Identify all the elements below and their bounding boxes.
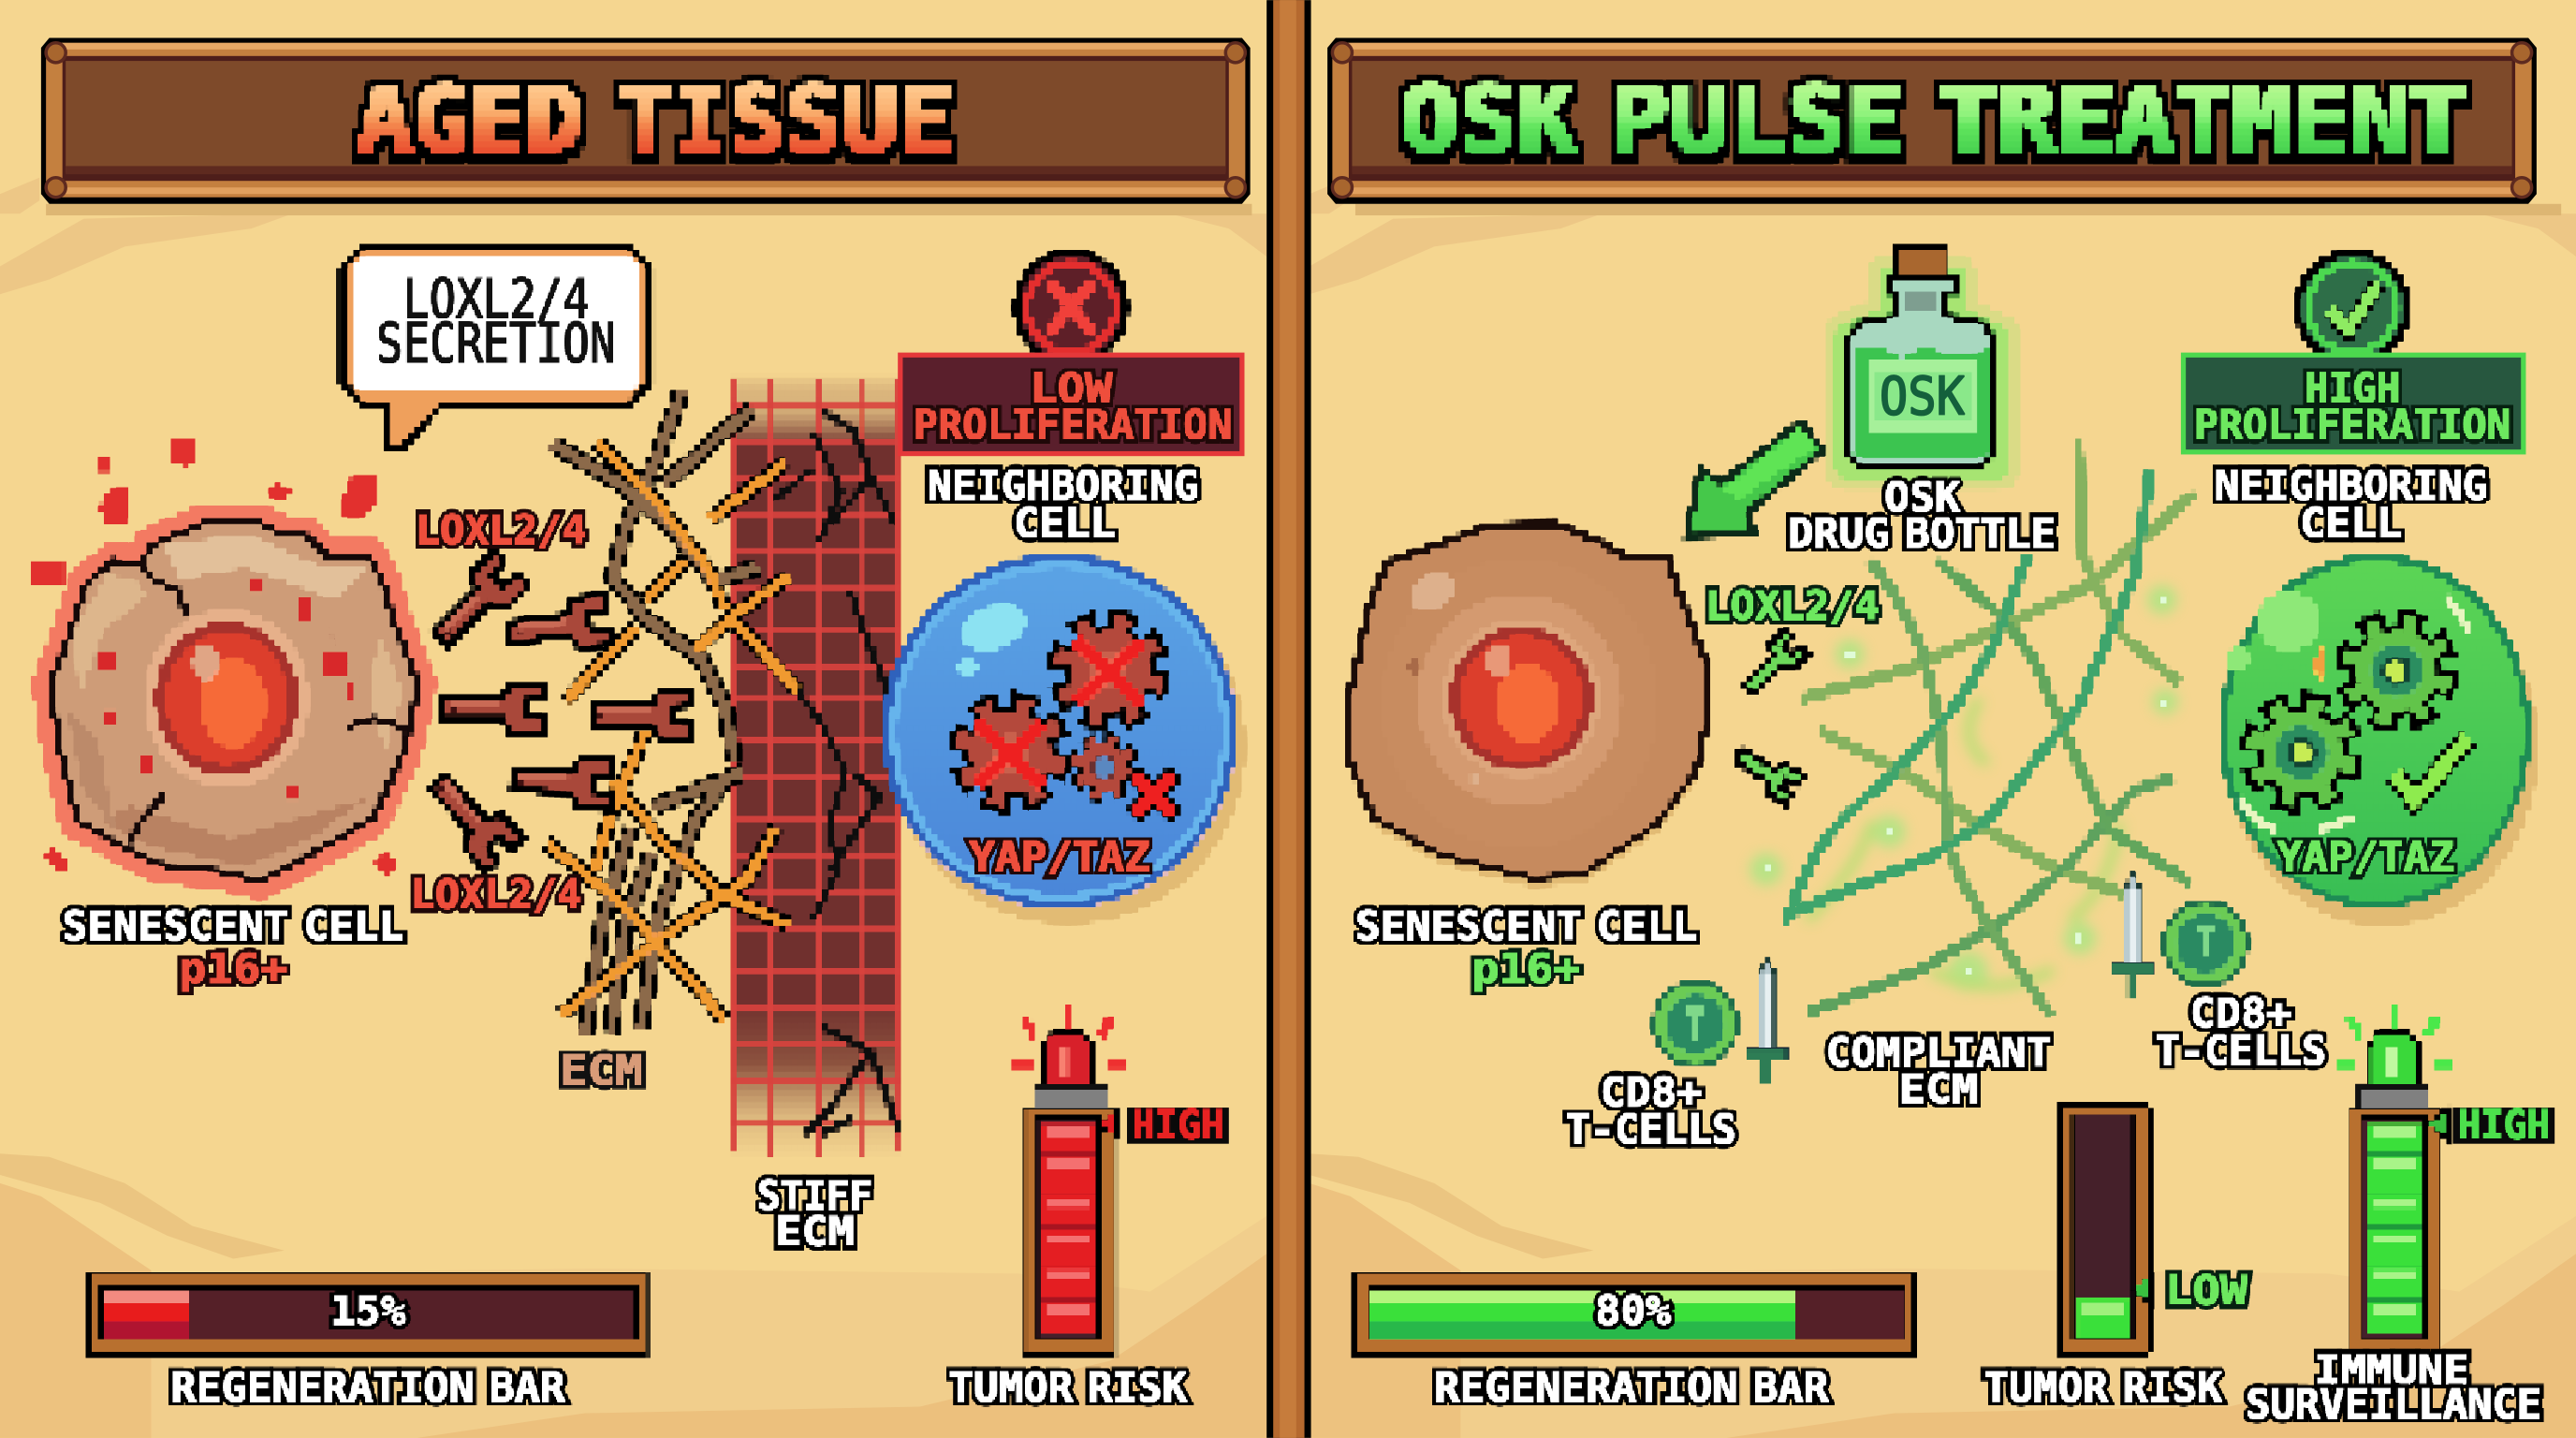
- neighboring cell: blue with broken gears: [882, 554, 1245, 924]
- label: neighboring cell: [928, 462, 1198, 548]
- label: tumor risk: TUMOR RISK: [1983, 1364, 2222, 1412]
- background sand patches: right: [1310, 178, 2576, 1438]
- label: senescent cell p16+: p16+: [1472, 946, 1580, 993]
- senescent cell: damaged: [33, 441, 418, 881]
- label: senescent cell p16+: p16+: [179, 946, 287, 993]
- label: neighboring cell: NEIGHBORING: [928, 462, 1198, 510]
- badge: low proliferation: LOW: [1030, 365, 1113, 413]
- neighboring cell: green with active gears: [2219, 554, 2539, 925]
- speech bubble: LOXL2/4 secretion: SECRETION: [376, 311, 616, 374]
- badge: high proliferation: PROLIFERATION: [2194, 402, 2511, 449]
- label: compliant ECM: [1826, 1029, 2051, 1113]
- CD8+ T-cell left: [1566, 961, 1787, 1154]
- regeneration bar: 15%: 15%: [330, 1287, 406, 1335]
- LOXL2/4 wrenches: [420, 550, 692, 872]
- debris: [33, 441, 398, 874]
- tumor risk meter: low: LOW: [2165, 1268, 2248, 1315]
- label: senescent cell p16+: [1355, 902, 1697, 993]
- stiff ECM grid: [731, 374, 903, 1158]
- regeneration bar: 80%: [1355, 1273, 1912, 1412]
- immune surveillance meter: high: [2246, 1005, 2554, 1429]
- label: OSK drug bottle: [1788, 474, 2056, 558]
- label: LOXL2/4 top: LOXL2/4: [416, 506, 587, 554]
- icon: OSK drug bottle: OSK: [1880, 366, 1965, 427]
- background sand patches: left: [0, 178, 1266, 1438]
- label: regeneration bar: REGENERATION BAR: [171, 1364, 565, 1412]
- label: immune surveillance: [2246, 1346, 2541, 1429]
- label: senescent cell p16+: SENESCENT CELL: [63, 902, 404, 950]
- senescent cell: healthy: [1349, 524, 1708, 993]
- CD8+ T-cell left: CD8+: [1600, 1068, 1702, 1116]
- label: immune surveillance: IMMUNE: [2315, 1346, 2469, 1394]
- label: neighboring cell: [2215, 462, 2487, 548]
- speech bubble: LOXL2/4 secretion: LOXL2/4: [402, 267, 590, 330]
- badge: high proliferation: [2184, 355, 2524, 452]
- neighboring cell: blue with broken gears: YAP/TAZ: [970, 833, 1150, 881]
- label: regeneration bar: REGENERATION BAR: [1434, 1364, 1829, 1412]
- label: stiff ECM: [757, 1172, 872, 1256]
- label: neighboring cell: CELL: [1014, 500, 1116, 548]
- divider: [1266, 0, 1311, 1438]
- CD8+ T-cell right: T-CELLS: [2156, 1027, 2326, 1075]
- tumor risk meter: high: [949, 1005, 1229, 1412]
- label: immune surveillance: SURVEILLANCE: [2246, 1381, 2541, 1429]
- title banner: OSK pulse treatment: [1327, 38, 2537, 204]
- reduced LOXL2/4 wrenches: LOXL2/4: [1705, 582, 1880, 630]
- CD8+ T-cell left: T-CELLS: [1566, 1107, 1736, 1154]
- title banner: aged tissue: AGED TISSUE: [357, 67, 955, 174]
- label: high: HIGH: [1132, 1101, 1224, 1149]
- label: OSK drug bottle: OSK: [1884, 474, 1960, 521]
- regeneration bar: 15%: [89, 1273, 646, 1412]
- CD8+ T-cell right: CD8+: [2190, 990, 2291, 1037]
- title banner: OSK pulse treatment: OSK PULSE TREATMENT: [1399, 67, 2467, 174]
- label: compliant ECM: ECM: [1899, 1065, 1978, 1113]
- label: ECM: ECM: [560, 1048, 642, 1095]
- label: stiff ECM: STIFF: [757, 1172, 872, 1220]
- label: senescent cell p16+: SENESCENT CELL: [1355, 902, 1697, 950]
- panel: aged tissue: [33, 38, 1251, 1412]
- arrow: OSK to cell: [1687, 422, 1822, 536]
- regeneration bar: 80%: 80%: [1595, 1287, 1672, 1335]
- label: tumor risk: TUMOR RISK: [949, 1364, 1188, 1412]
- badge: low proliferation: [900, 355, 1242, 454]
- label: LOXL2/4 bottom: LOXL2/4: [411, 872, 581, 919]
- label: neighboring cell: CELL: [2300, 500, 2402, 548]
- tumor risk meter: low: [1983, 1105, 2248, 1412]
- label: high: HIGH: [2458, 1101, 2550, 1149]
- speech bubble: LOXL2/4 secretion: [342, 246, 651, 448]
- icon: low proliferation X: [1017, 253, 1125, 361]
- badge: low proliferation: PROLIFERATION: [914, 402, 1232, 449]
- title banner: aged tissue: [41, 38, 1251, 204]
- ECM fibres: [547, 391, 798, 1034]
- icon: OSK drug bottle: [1788, 248, 2056, 558]
- badge: high proliferation: HIGH: [2305, 365, 2400, 413]
- label: senescent cell p16+: [63, 902, 404, 993]
- label: neighboring cell: NEIGHBORING: [2215, 462, 2487, 510]
- neighboring cell: green with active gears: YAP/TAZ: [2277, 833, 2454, 881]
- panel: OSK pulse treatment: [1327, 38, 2554, 1429]
- label: compliant ECM: COMPLIANT: [1826, 1029, 2051, 1077]
- label: OSK drug bottle: DRUG BOTTLE: [1788, 510, 2056, 558]
- icon: high proliferation check: [2298, 253, 2407, 361]
- label: stiff ECM: ECM: [775, 1209, 855, 1256]
- reduced LOXL2/4 wrenches: [1705, 582, 1880, 804]
- compliant ECM fibres: [1749, 439, 2195, 1016]
- CD8+ T-cell right: [2113, 876, 2326, 1075]
